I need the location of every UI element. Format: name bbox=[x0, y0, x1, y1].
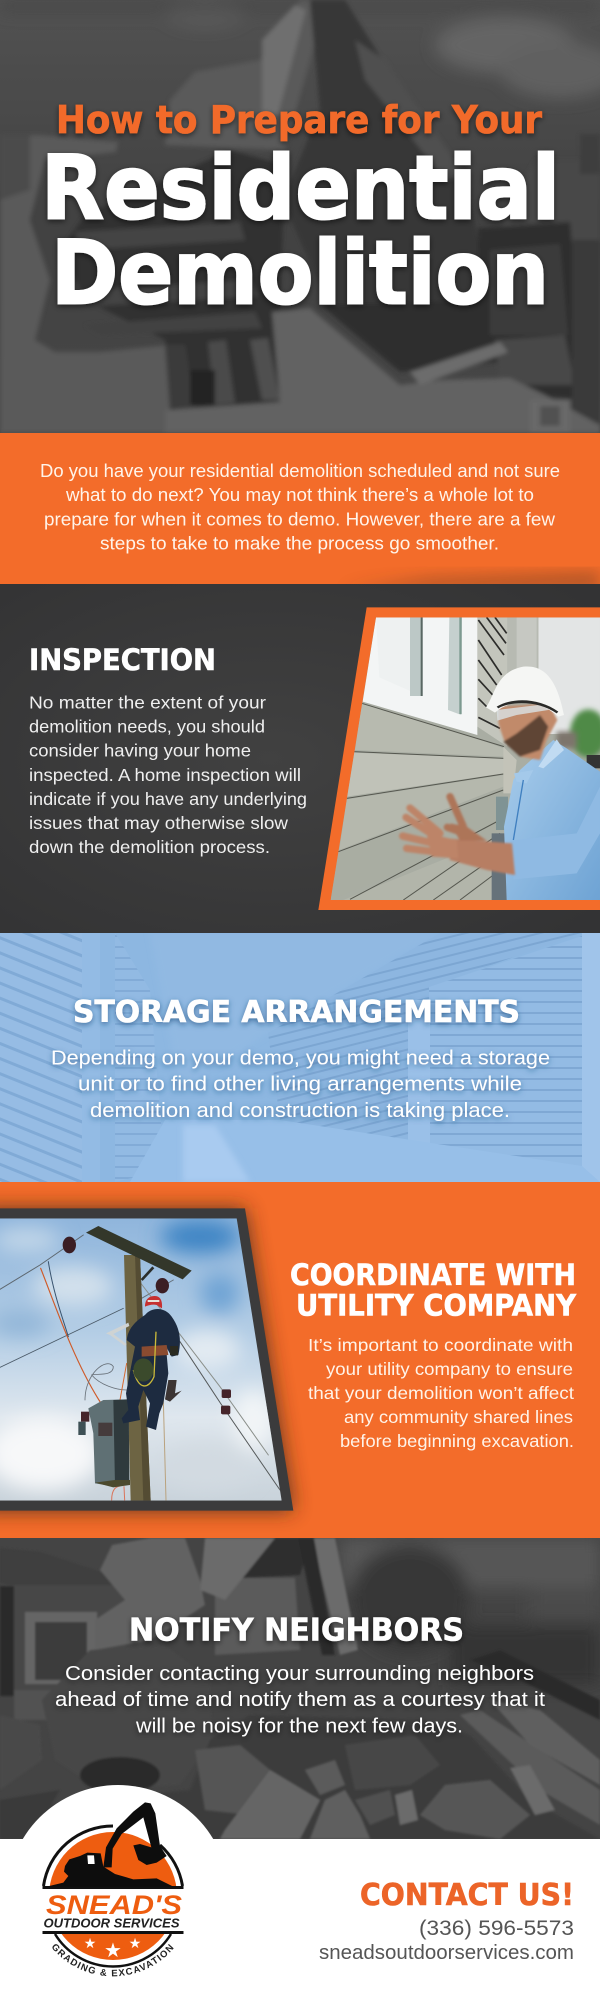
utility text: before beginning excavation. bbox=[340, 1431, 574, 1451]
logo: Snead's Outdoor Services bbox=[42, 1802, 184, 1976]
inspection text: indicate if you have any underlying bbox=[29, 789, 307, 809]
boom bbox=[290, 0, 477, 306]
tree bbox=[570, 709, 600, 757]
footer panel: logo and contact bbox=[22, 1785, 574, 1976]
rubble bbox=[0, 1715, 600, 1839]
logo tagline on arc: GRADING & EXCAVATION bbox=[52, 1944, 174, 1976]
utility text: It’s important to coordinate with bbox=[308, 1335, 573, 1355]
inspection text: No matter the extent of your bbox=[29, 692, 266, 712]
cross arm bbox=[86, 1226, 192, 1279]
siding courses bbox=[355, 703, 504, 757]
utility text: your utility company to ensure bbox=[326, 1359, 573, 1379]
storage text: demolition and construction is taking place. bbox=[90, 1100, 510, 1122]
inspection text: demolition needs, you should bbox=[29, 717, 265, 737]
cab right bbox=[478, 222, 573, 398]
utility text: that your demolition won’t affect bbox=[308, 1383, 574, 1403]
excavator stick bbox=[165, 0, 325, 150]
roof and chimney right bbox=[508, 218, 576, 236]
wires bbox=[0, 1235, 280, 1500]
storage text bbox=[51, 1048, 550, 1122]
icon: excavator silhouette bbox=[47, 1802, 173, 1887]
storage text: Depending on your demo, you might need a storage bbox=[51, 1048, 550, 1070]
utility heading: COORDINATE WITH bbox=[290, 1258, 576, 1292]
background photo: rubble and excavator (greyscale) bbox=[0, 1538, 600, 1839]
upper siding with dark stripes bbox=[477, 617, 507, 747]
logo stars: ★ bbox=[104, 1940, 122, 1962]
background photo: storage units (blue duotone) bbox=[0, 933, 600, 1182]
hard hat bbox=[486, 666, 564, 717]
transformer bbox=[88, 1399, 129, 1487]
helmet bbox=[145, 1296, 162, 1308]
photo: lineman on utility pole bbox=[0, 1208, 293, 1511]
intro text: what to do next? You may not think there’s a whole lot to bbox=[65, 484, 534, 505]
inspection text: inspected. A home inspection will bbox=[29, 765, 301, 785]
logo disc bbox=[42, 1826, 184, 1967]
inspection text: down the demolition process. bbox=[29, 837, 270, 857]
contact website: sneadsoutdoorservices.com bbox=[319, 1942, 574, 1964]
utility text bbox=[308, 1335, 574, 1451]
logo stars: ★ bbox=[84, 1935, 96, 1951]
window bbox=[363, 617, 477, 735]
column bbox=[507, 617, 538, 674]
logo stars: ★ bbox=[129, 1935, 141, 1951]
logo: Snead's Outdoor Services: OUTDOOR SERVICES bbox=[44, 1916, 180, 1930]
storage heading: STORAGE ARRANGEMENTS bbox=[73, 995, 520, 1030]
face bbox=[498, 703, 557, 760]
intro panel: orange band with intro paragraph bbox=[0, 433, 600, 590]
notify text: ahead of time and notify them as a courtesy that it bbox=[55, 1689, 545, 1711]
wrecking bucket bbox=[42, 1645, 212, 1790]
intro text: steps to take to make the process go smoother. bbox=[100, 532, 499, 554]
photo: inspector checking siding bbox=[318, 607, 600, 910]
intro text: Do you have your residential demolition scheduled and not sure bbox=[40, 460, 560, 481]
pole bbox=[124, 1255, 151, 1501]
notify text: Consider contacting your surrounding neighbors bbox=[65, 1663, 534, 1685]
notify text: will be noisy for the next few days. bbox=[135, 1716, 463, 1738]
notify heading: NOTIFY NEIGHBORS bbox=[129, 1612, 464, 1648]
rubble pile bbox=[165, 308, 600, 433]
bucket teeth bbox=[168, 346, 191, 406]
logo wordmark: SNEAD'S bbox=[46, 1890, 182, 1920]
sky bbox=[538, 617, 600, 734]
inspection text: consider having your home bbox=[29, 741, 251, 761]
wall edge bbox=[503, 747, 517, 793]
utility text: any community shared lines bbox=[344, 1407, 573, 1427]
logo stars bbox=[84, 1935, 141, 1962]
panel: notify neighbors bbox=[0, 1538, 600, 1839]
intro text bbox=[40, 460, 560, 554]
cab and arm bbox=[215, 1578, 300, 1655]
house roof and wall bbox=[0, 1548, 125, 1590]
insulators bbox=[63, 1237, 76, 1253]
notify text bbox=[55, 1663, 545, 1738]
inspection heading: INSPECTION bbox=[29, 643, 216, 677]
hero panel: excavator demolition photo with title bbox=[0, 0, 600, 433]
arm and hands bbox=[403, 797, 515, 875]
machinery under boom bbox=[322, 300, 497, 372]
intro text: prepare for when it comes to demo. However, there are a few bbox=[44, 508, 556, 530]
storage text: unit or to find other living arrangements while bbox=[78, 1074, 522, 1096]
title: Residential Demolition bbox=[41, 136, 560, 324]
shirt bbox=[504, 740, 600, 900]
inspection text: issues that may otherwise slow bbox=[29, 813, 288, 833]
panel: inspection bbox=[0, 584, 600, 933]
lineman bbox=[122, 1309, 180, 1430]
wall left bbox=[0, 135, 180, 433]
title: Residential Demolition: Residential bbox=[41, 136, 560, 240]
bucket bbox=[60, 150, 285, 410]
panel: storage arrangements bbox=[0, 933, 600, 1182]
hero photo: excavator tearing down a house (greyscale) bbox=[0, 0, 600, 433]
contact heading: CONTACT US! bbox=[360, 1878, 574, 1913]
subtitle: How to Prepare for Your: How to Prepare for Your bbox=[56, 98, 542, 142]
utility heading bbox=[290, 1258, 577, 1322]
panel: coordinate with utility company bbox=[0, 1182, 600, 1538]
photo frame shadow bbox=[0, 1208, 293, 1511]
inspection text bbox=[29, 692, 307, 857]
contact phone: (336) 596-5573 bbox=[419, 1917, 574, 1940]
title: Residential Demolition: Demolition bbox=[51, 222, 549, 324]
utility heading: UTILITY COMPANY bbox=[296, 1288, 577, 1322]
beams right bbox=[460, 1710, 600, 1825]
